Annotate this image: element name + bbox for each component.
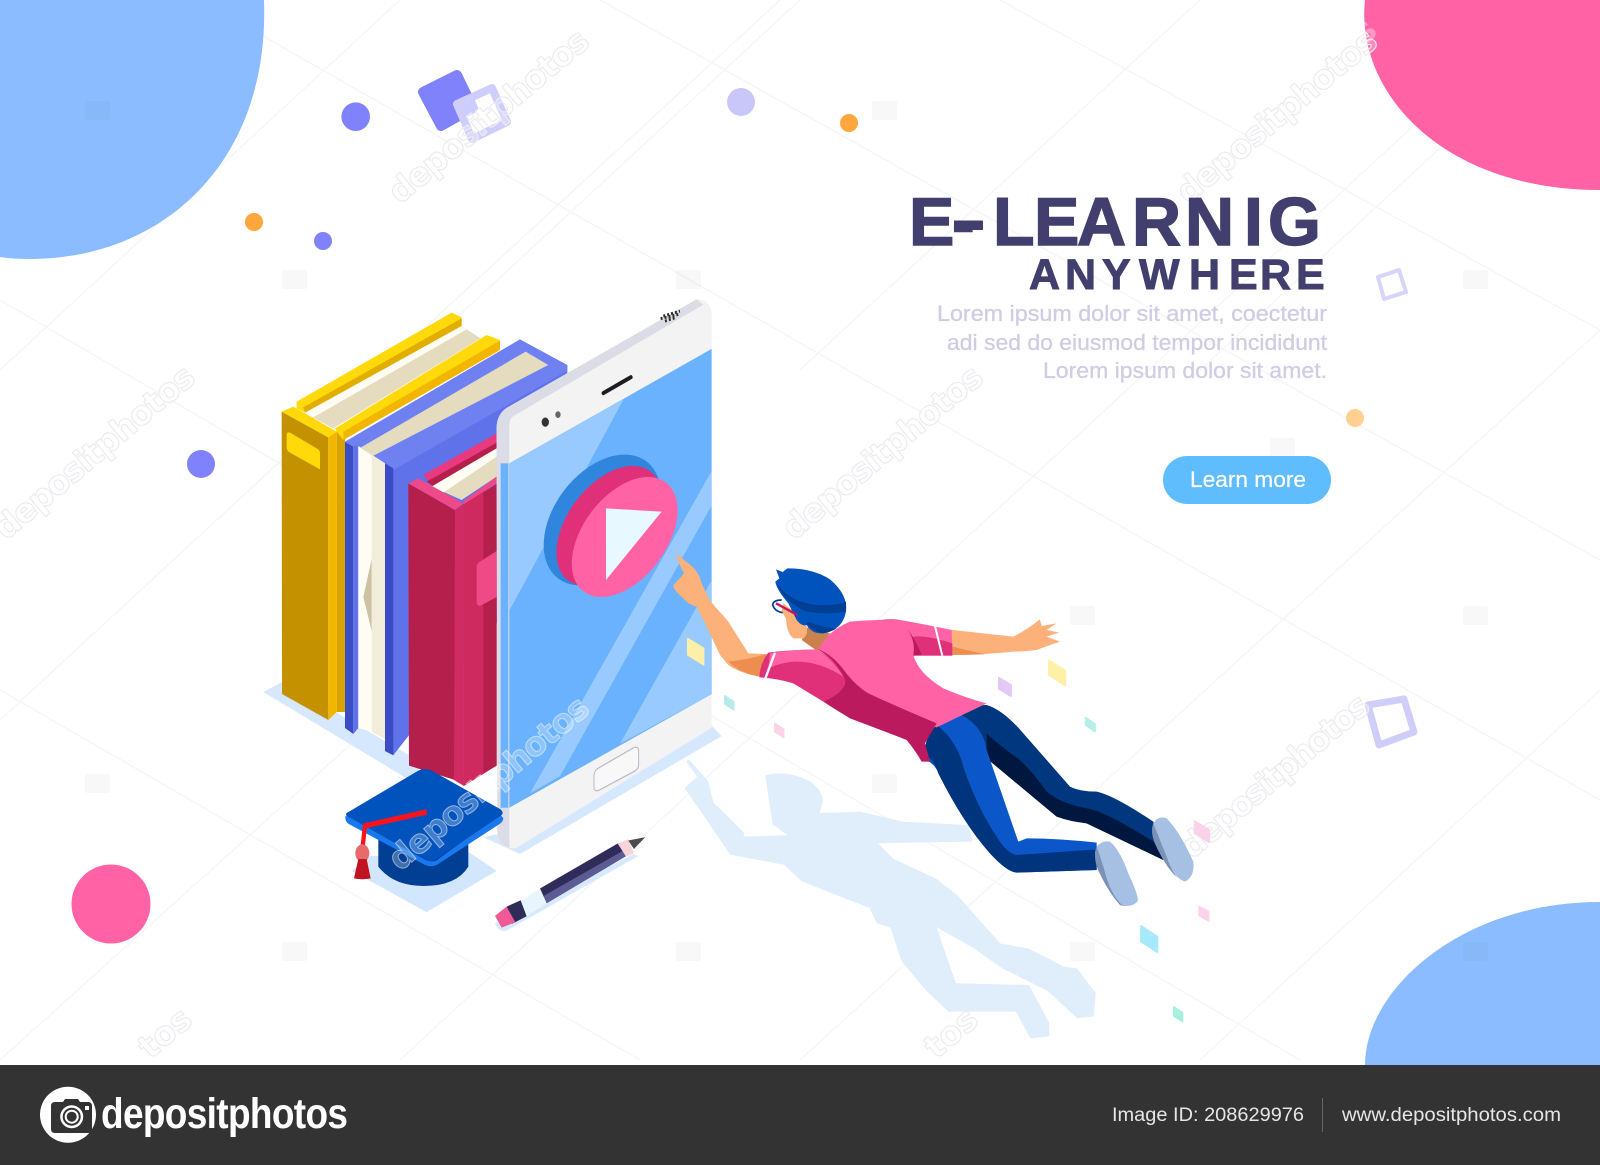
watermark text on background: depositphotos xyxy=(1168,21,1385,211)
cap and pencil xyxy=(345,769,645,931)
watermark text on background: depositphotos xyxy=(1172,685,1377,866)
description text: adi sed do eiusmod tempor incididunt xyxy=(947,330,1327,355)
person shadow xyxy=(687,762,1094,1037)
pencil xyxy=(495,837,645,931)
back leg xyxy=(955,705,1163,860)
image id: Image ID: 208629976 xyxy=(1112,1105,1304,1126)
play button xyxy=(520,432,699,617)
description text xyxy=(937,301,1327,383)
logo wordmark: depositphotos xyxy=(101,1091,348,1138)
confetti squares xyxy=(688,639,1209,1022)
torso xyxy=(817,620,987,762)
description text: Lorem ipsum dolor sit amet. xyxy=(1043,358,1327,383)
book: yellow xyxy=(282,313,500,720)
decorative shape: top-right pink blob xyxy=(1364,0,1600,190)
subtitle: ANYWHERE xyxy=(1029,251,1325,299)
description text: Lorem ipsum dolor sit amet, coectetur xyxy=(937,301,1327,326)
phone screen xyxy=(509,349,712,808)
watermark camera marks xyxy=(85,101,1488,961)
decorative squares xyxy=(423,75,1414,745)
phone speaker, camera, sensors, home button xyxy=(542,311,680,791)
decorative shape: pink circle xyxy=(72,864,150,944)
person shadow and confetti xyxy=(687,639,1209,1037)
person xyxy=(673,553,1194,906)
watermark fragment on pink blob: s xyxy=(1344,10,1384,52)
upper body xyxy=(873,619,1060,656)
decorative shape: bottom-right blue blob xyxy=(1365,902,1600,1065)
watermark text on background: depositphotos xyxy=(774,357,991,547)
near sleeve xyxy=(759,649,845,702)
footer bar xyxy=(0,1065,1600,1165)
illustration: stack of books xyxy=(282,313,567,786)
far arm xyxy=(947,619,1060,655)
floor shadows xyxy=(263,681,722,854)
button: learn more: Learn more xyxy=(1190,467,1306,492)
watermark text on background: depositphotos xyxy=(380,21,597,211)
far sleeve xyxy=(873,619,952,656)
book: blue xyxy=(345,339,567,755)
smartphone xyxy=(497,299,712,848)
watermark text on background xyxy=(0,21,1385,1066)
shoes xyxy=(1095,817,1194,906)
button: learn more xyxy=(1163,456,1331,504)
watermark over phone and cap: depositphotos xyxy=(380,688,597,878)
watermark text on background: tos xyxy=(916,999,986,1066)
torso, near arm, head xyxy=(673,553,987,762)
near arm xyxy=(673,553,767,677)
graduation cap xyxy=(345,769,503,912)
head xyxy=(773,568,846,651)
decorative dots xyxy=(187,88,1364,478)
website: www.depositphotos.com xyxy=(1341,1105,1561,1126)
logo: camera icon xyxy=(40,1087,96,1143)
legs xyxy=(924,705,1194,906)
front leg xyxy=(924,715,1097,873)
watermark text on background: tos xyxy=(130,999,200,1066)
decorative shape: top-left blue blob xyxy=(0,0,264,259)
book: red xyxy=(408,433,497,786)
title: E-LEARNIG xyxy=(909,184,1321,260)
